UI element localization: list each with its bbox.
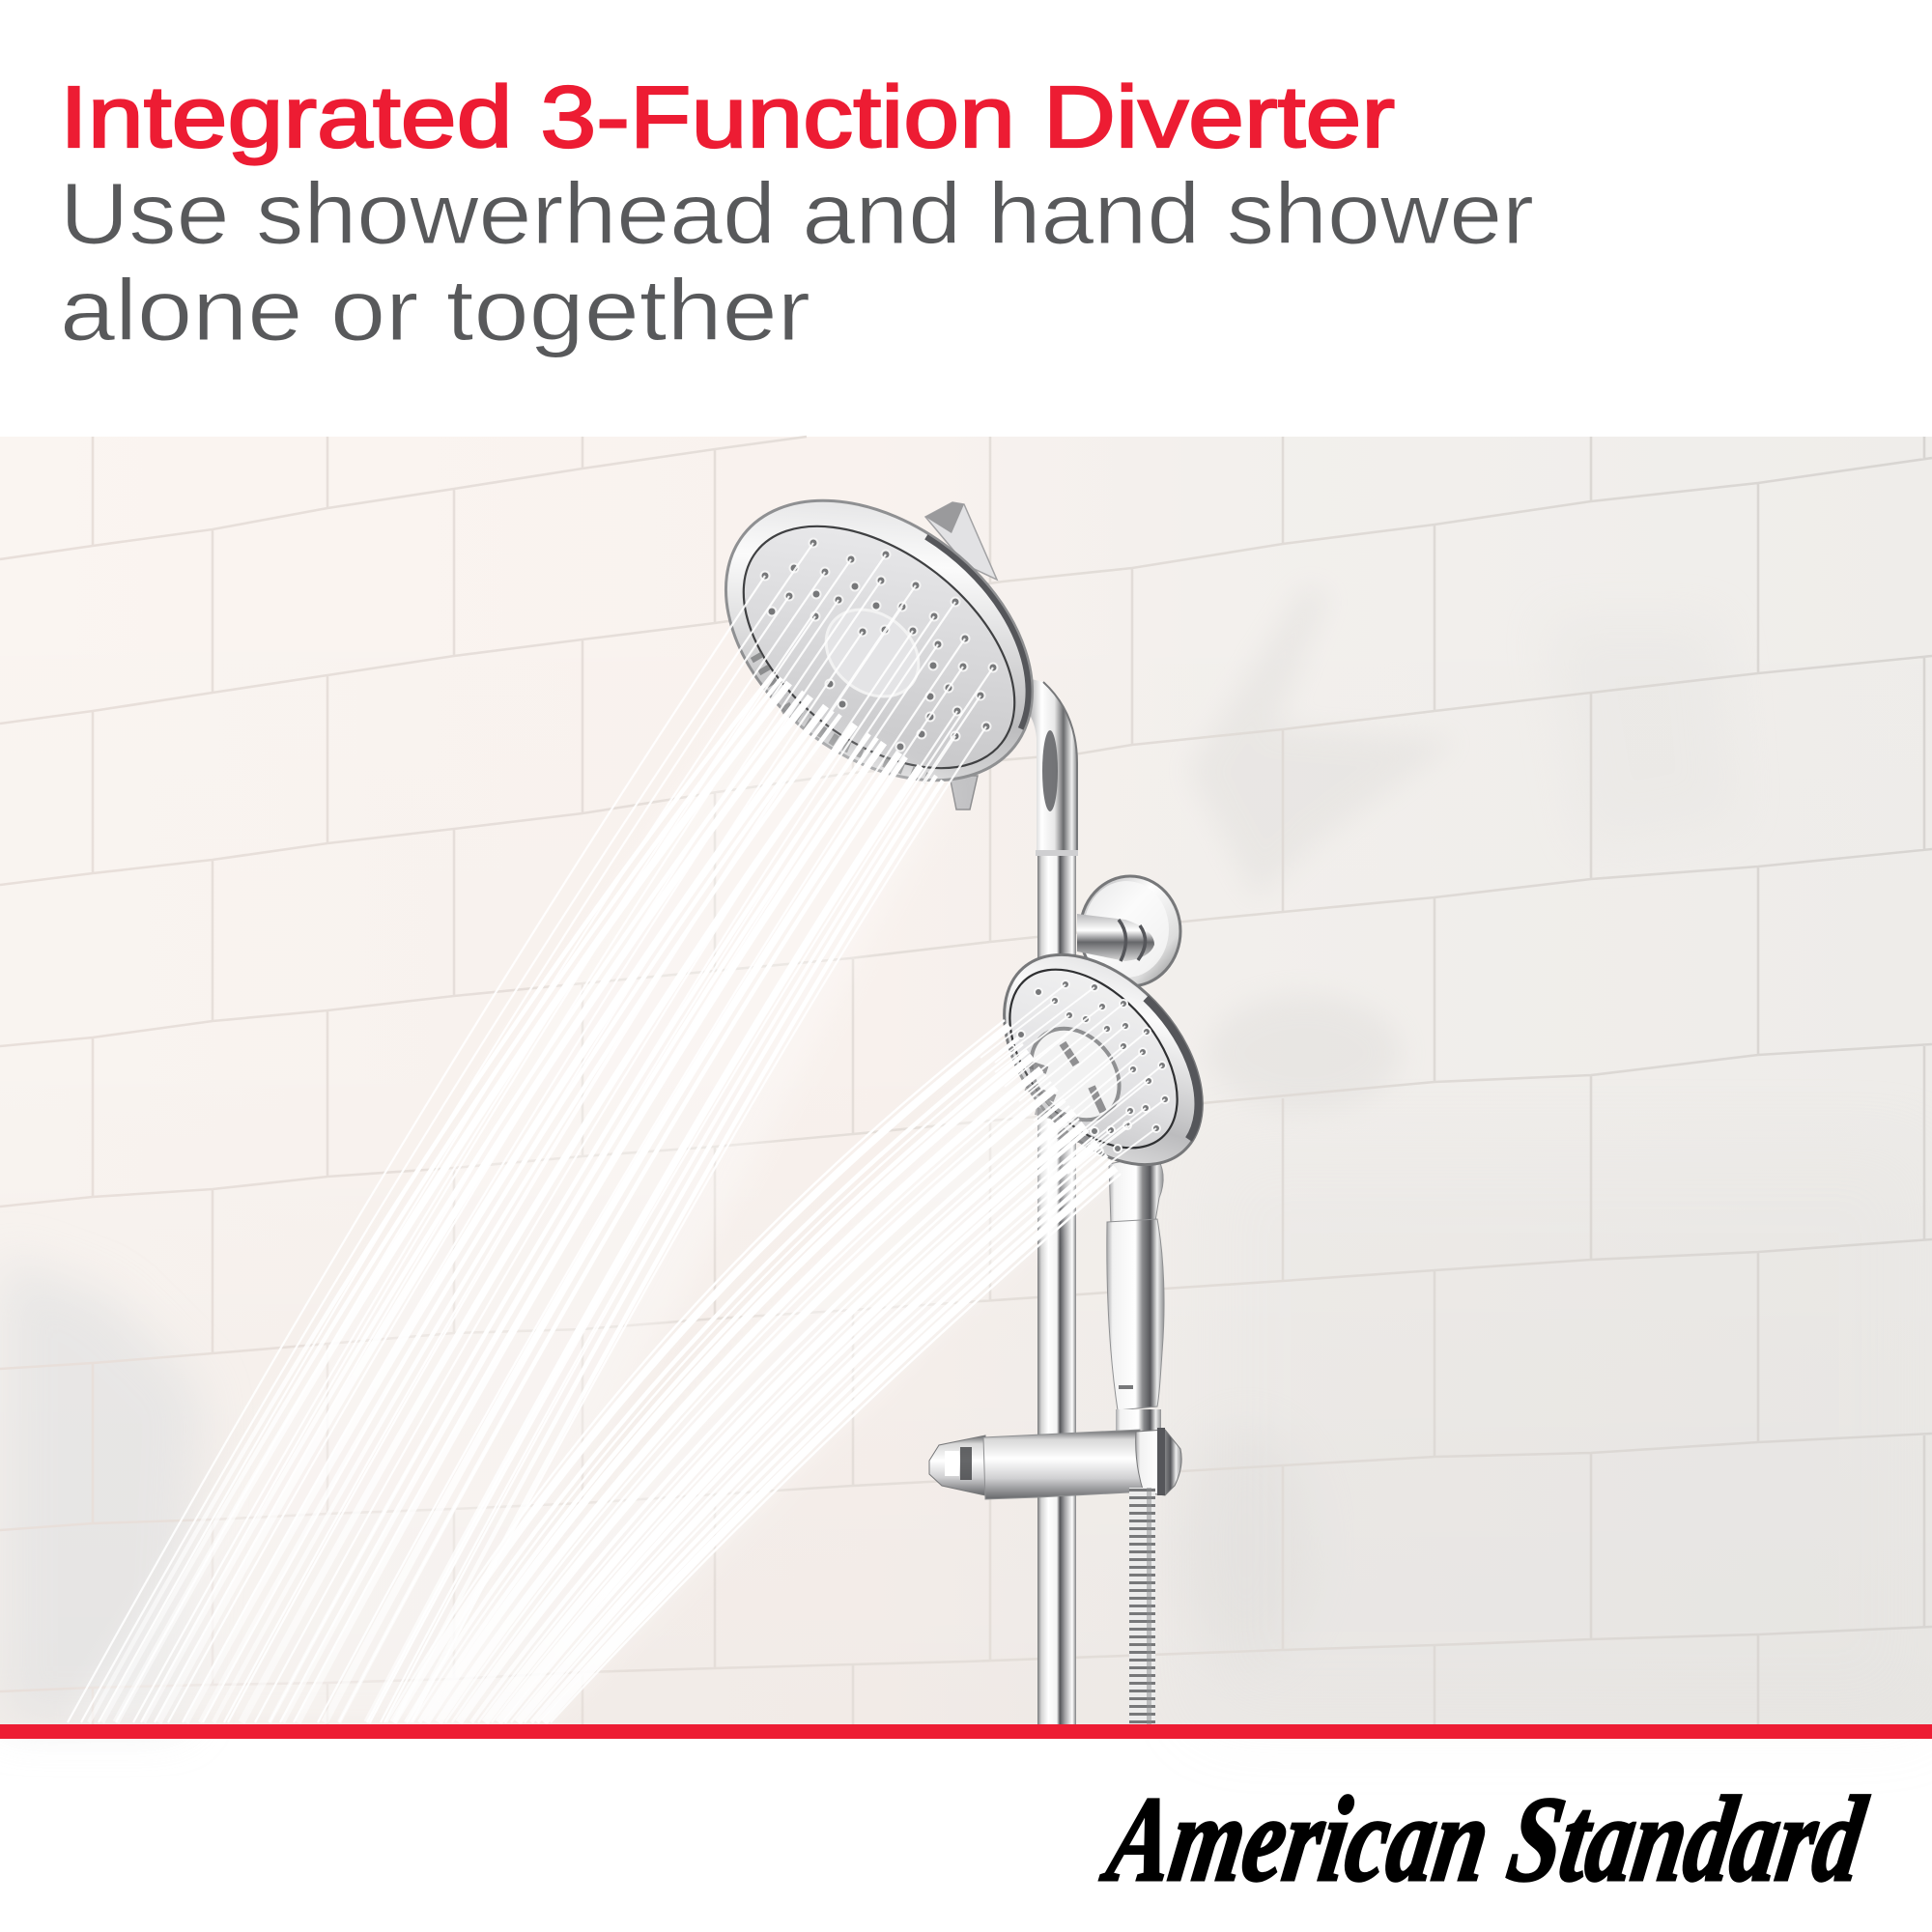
medium streams from hand shower xyxy=(406,1038,1111,1722)
holder left end xyxy=(929,1435,985,1495)
hand shower holder xyxy=(929,1428,1181,1499)
thick streams from hand shower xyxy=(393,1026,1116,1722)
hand shower reflections xyxy=(1024,1043,1103,1141)
overhead showerhead xyxy=(672,443,1086,838)
tiled wall background xyxy=(0,437,1932,1724)
thin streams from showerhead nozzles xyxy=(68,543,993,1722)
subheading line 1: Use showerhead and hand shower xyxy=(60,166,1534,263)
thin streams from hand shower nozzles xyxy=(980,984,1165,1183)
heading: Integrated 3-Function Diverter: Integrated 3-Function Diverter xyxy=(60,70,1395,166)
thick streams from showerhead xyxy=(116,683,921,1722)
red divider band xyxy=(0,1724,1932,1739)
arm connector behind showerhead xyxy=(925,502,997,580)
hand shower neck xyxy=(1109,1154,1163,1225)
showerhead nozzles xyxy=(761,539,997,752)
shower arm xyxy=(1000,671,1078,856)
heading block xyxy=(60,70,1534,359)
holder main body xyxy=(983,1430,1146,1499)
medium streams from showerhead xyxy=(89,673,943,1722)
showerhead lever xyxy=(950,776,978,810)
hand shower grip xyxy=(1107,1219,1164,1410)
fine streams from hand shower xyxy=(386,1020,1121,1722)
slide rail xyxy=(1037,852,1076,1724)
grip brand mark xyxy=(1119,1385,1133,1389)
holder right clamp xyxy=(1136,1430,1181,1495)
hand shower lower collar xyxy=(1116,1409,1161,1440)
photo: shower on tiled wall xyxy=(0,437,1932,1724)
wall mount bracket xyxy=(1077,876,1180,986)
flexible hose xyxy=(1129,1488,1155,1724)
water spray from showerhead xyxy=(68,543,993,1722)
hand shower head xyxy=(965,917,1241,1203)
hand shower nozzles xyxy=(1008,980,1169,1155)
water spray from hand shower xyxy=(386,984,1165,1722)
showerhead rim reflections xyxy=(755,655,927,779)
hand shower xyxy=(965,917,1241,1440)
subheading line 2: alone or together xyxy=(60,263,810,359)
